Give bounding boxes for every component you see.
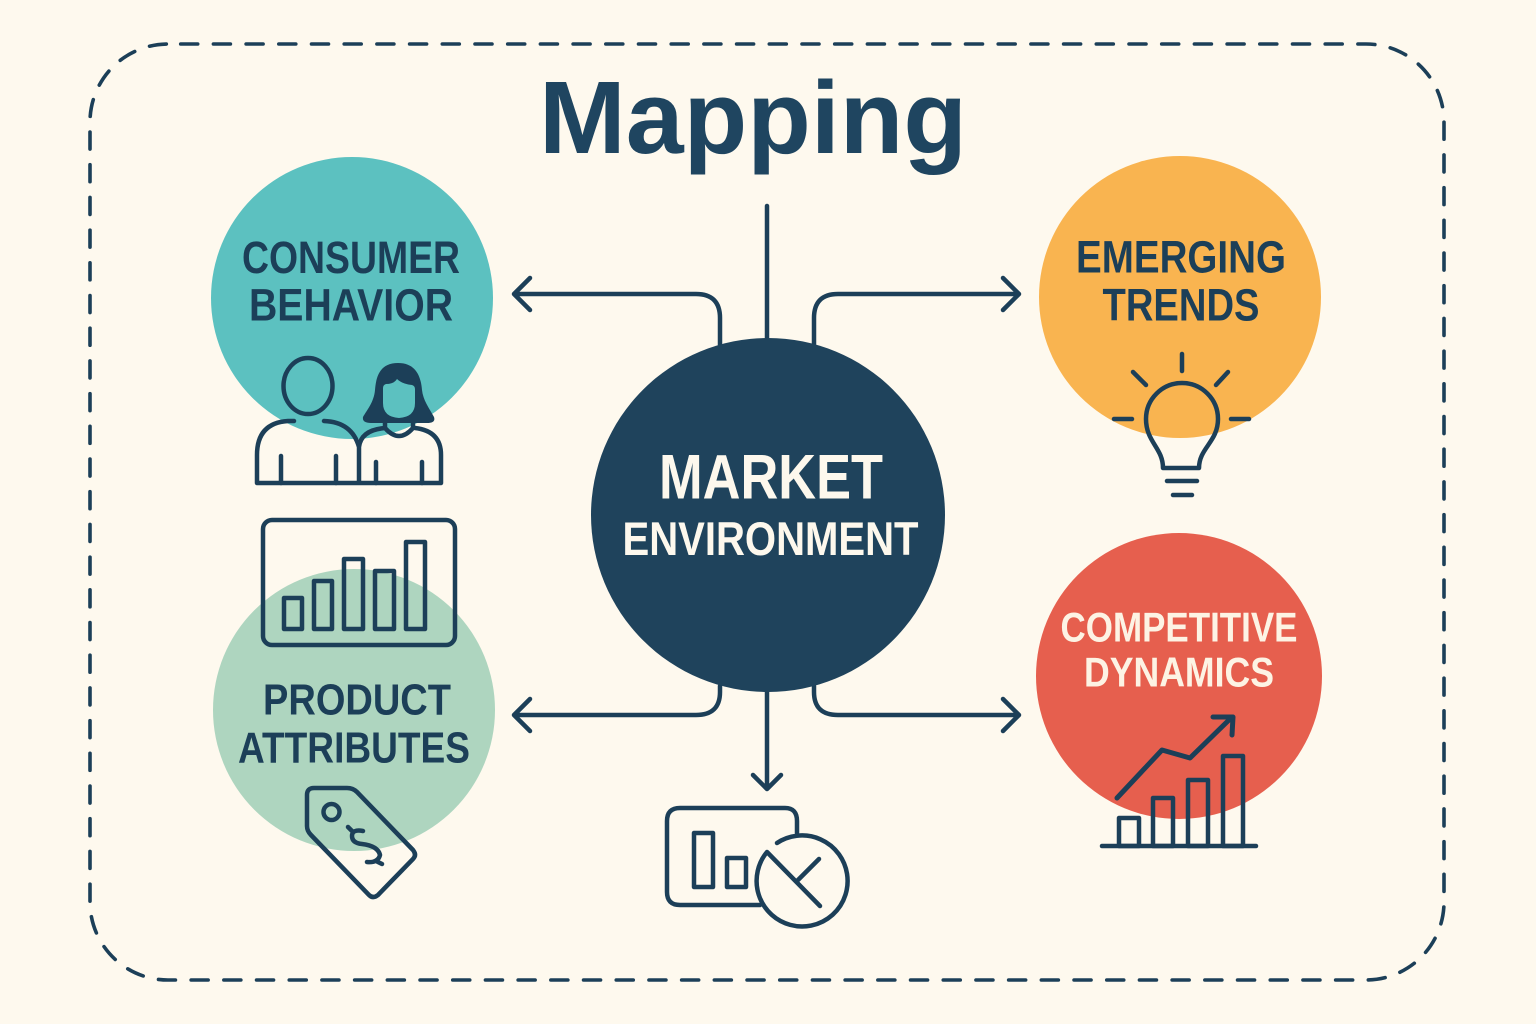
title: Mapping — [539, 60, 967, 175]
panel: emerging trends: EMERGING — [1076, 232, 1286, 282]
icon: price tag — [307, 788, 415, 897]
panel: product attributes: ATTRIBUTES — [238, 724, 470, 772]
icon: light bulb — [1114, 354, 1249, 495]
panel: competitive dynamics: COMPETITIVE — [1060, 604, 1298, 650]
center circle: market environment: ENVIRONMENT — [622, 512, 919, 565]
connector lines and arrows — [514, 206, 1019, 789]
icon: chart and pie — [667, 808, 848, 926]
icon: bar chart panel — [263, 520, 455, 645]
panel: consumer behavior — [211, 157, 493, 483]
panel: product attributes: PRODUCT — [263, 676, 451, 724]
center circle: market environment — [591, 338, 945, 692]
panel: competitive dynamics: DYNAMICS — [1084, 648, 1274, 696]
icon: two people — [257, 358, 441, 483]
panel: competitive dynamics — [1036, 533, 1322, 846]
center circle: market environment: MARKET — [659, 442, 883, 512]
panel: consumer behavior: CONSUMER — [242, 232, 460, 283]
icon: growth chart — [1102, 717, 1256, 846]
panel: emerging trends — [1039, 156, 1321, 495]
panel: consumer behavior: BEHAVIOR — [249, 280, 453, 330]
panel: emerging trends: TRENDS — [1102, 280, 1260, 330]
panel: product attributes — [213, 520, 495, 897]
